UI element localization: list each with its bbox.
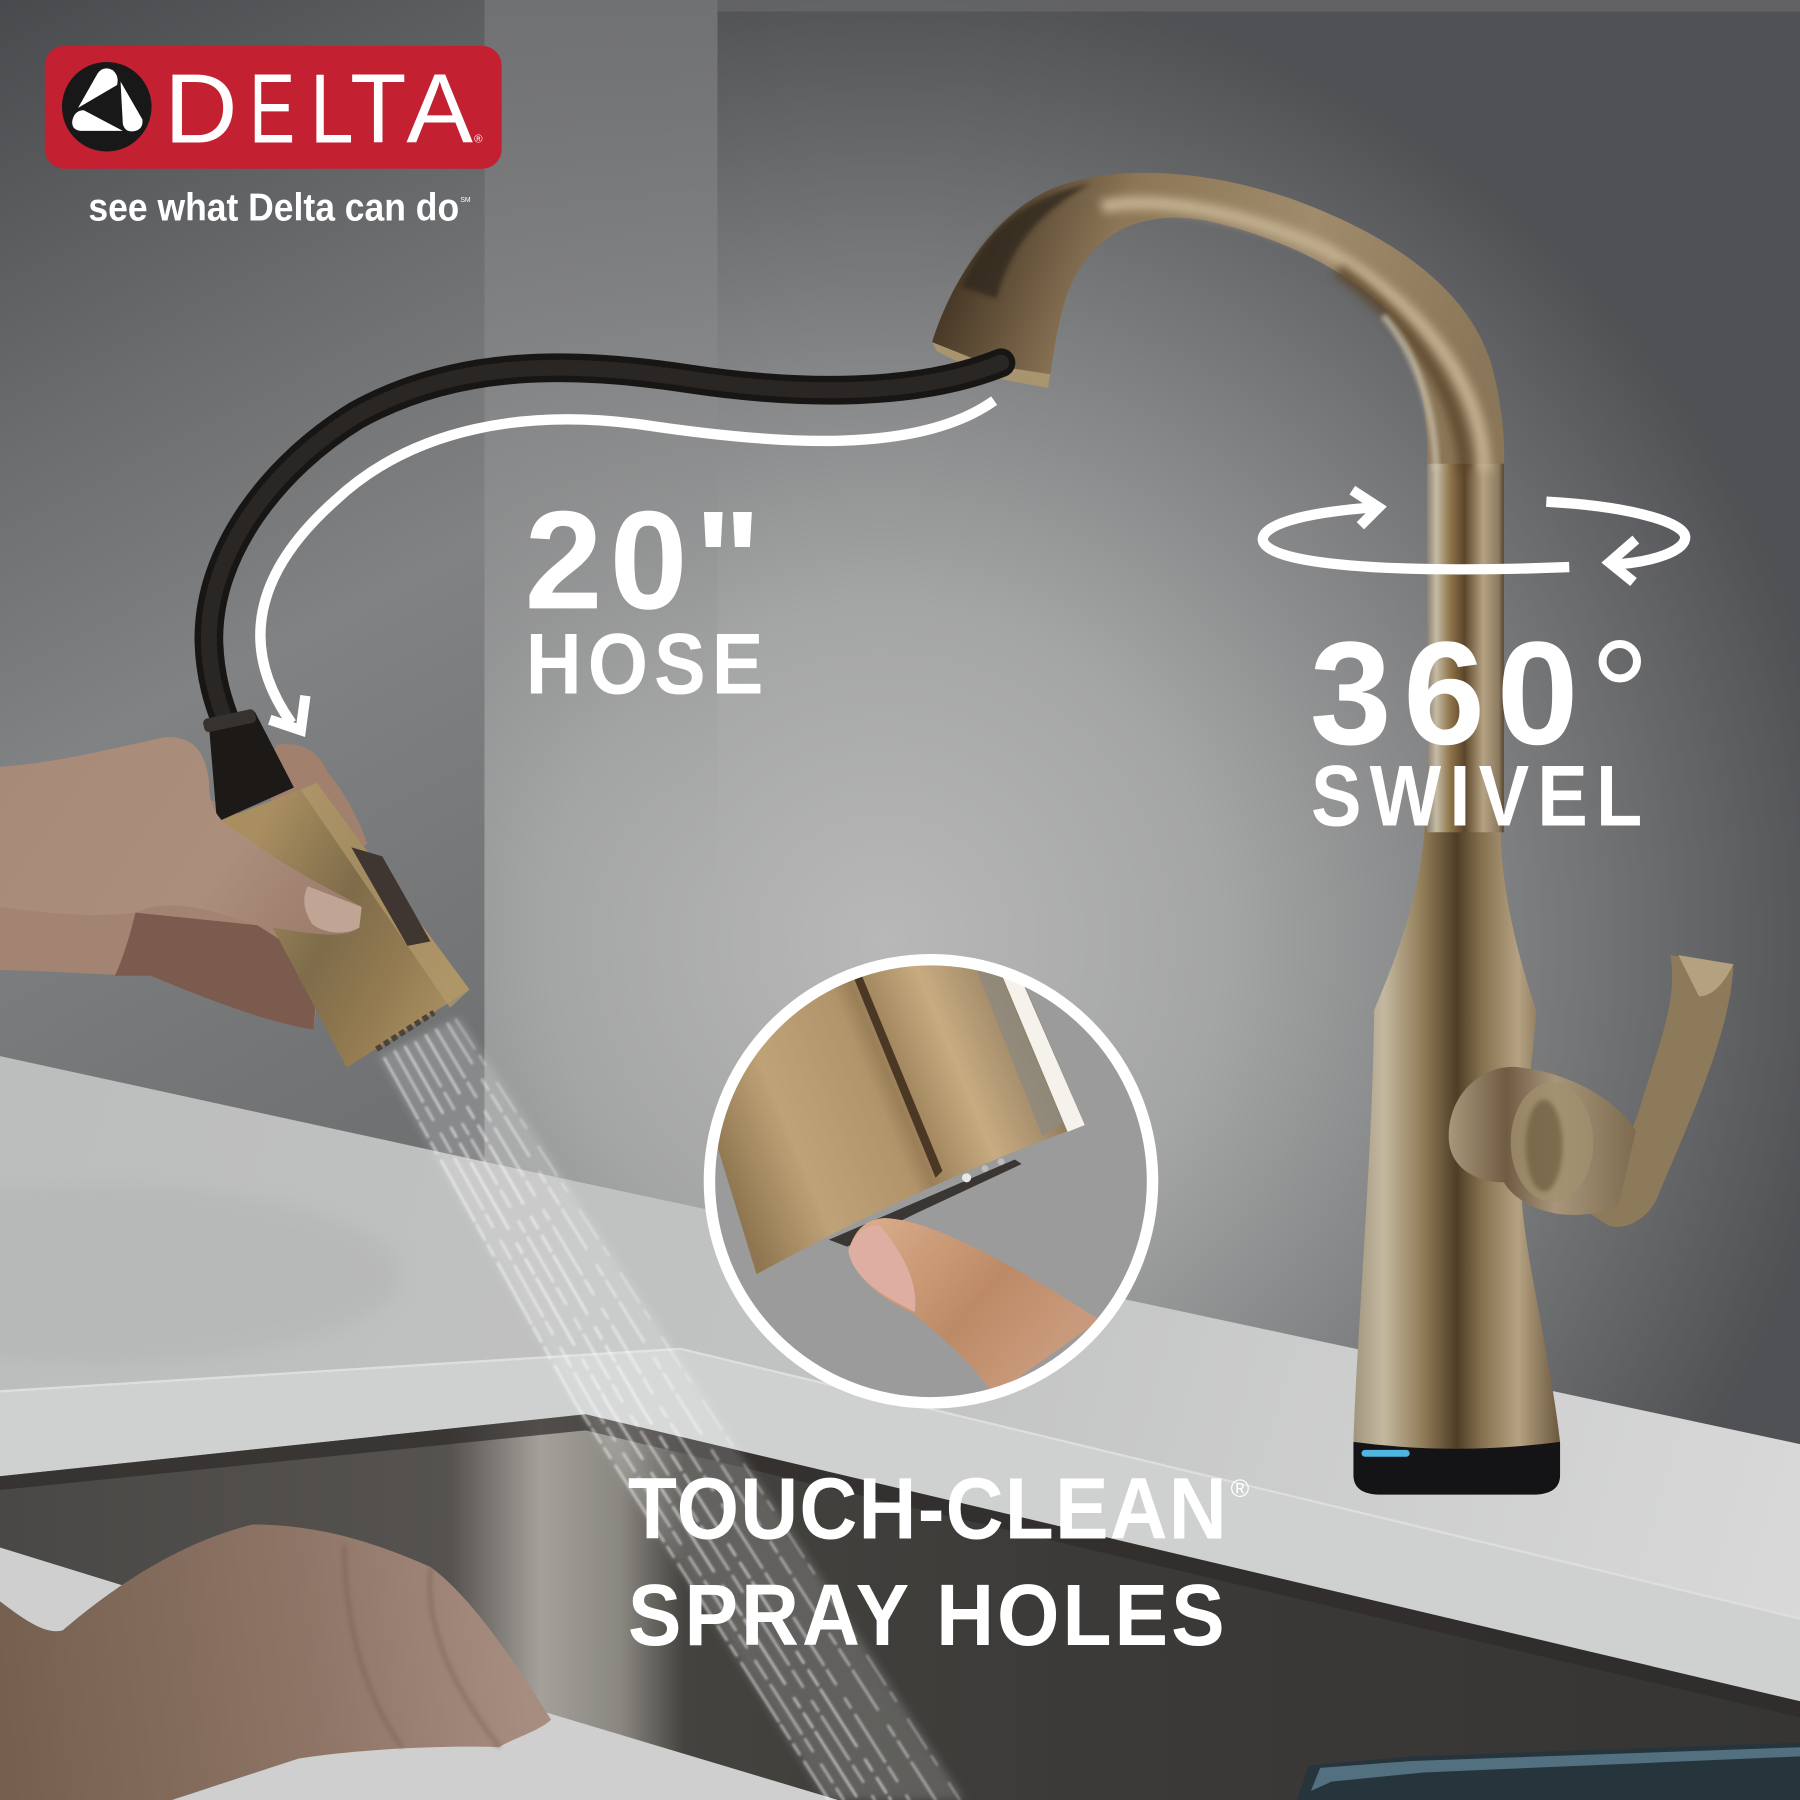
brand logo: ®: [474, 133, 483, 145]
arrows: 360 swivel: [1263, 490, 1685, 582]
icon: delta triangle mark: [62, 62, 152, 152]
palm: [0, 767, 327, 1030]
faucet column: [1427, 459, 1504, 832]
faucet body: [1353, 827, 1560, 1449]
spray head button: [351, 847, 430, 946]
spray head body: [217, 783, 470, 1068]
stainless sink basin: [0, 1414, 1800, 1800]
close-up finger: [848, 1218, 1100, 1395]
brand tagline: SM: [460, 197, 471, 204]
arrow: hose length: [260, 401, 994, 730]
faucet handle: [1449, 955, 1733, 1227]
wordmark: D: [164, 53, 238, 163]
label: 360 degree swivel: SWIVEL: [1311, 749, 1642, 844]
label: touch-clean spray holes: [628, 1459, 1250, 1664]
wordmark: L: [310, 53, 354, 163]
braided hose: [209, 363, 1001, 726]
label: touch-clean spray holes: TOUCH-CLEAN: [628, 1459, 1227, 1557]
water spray: [379, 1017, 964, 1800]
label: 360 degree swivel: [1310, 612, 1642, 844]
close-up spray holes: [829, 1159, 1022, 1247]
close-up spray head: [718, 965, 1085, 1274]
wordmark: E: [249, 53, 295, 163]
bottom-left hand on sink: [0, 1524, 551, 1800]
faucet: [932, 173, 1733, 1495]
label: 20 inch hose: [525, 481, 763, 712]
wordmark: [164, 53, 473, 163]
label: touch-clean spray holes: SPRAY HOLES: [628, 1566, 1225, 1664]
thumb and back of hand: [0, 737, 362, 935]
faucet spout arc: [932, 173, 1504, 471]
countertop: [0, 1056, 1800, 1800]
label: 20 inch hose: HOSE: [526, 617, 763, 712]
left hand holding sprayer: [0, 708, 470, 1068]
wordmark: T: [350, 53, 406, 163]
spray head collar: [209, 712, 294, 822]
wordmark: A: [406, 53, 473, 163]
callout: touch-clean spray holes close-up: [700, 941, 1153, 1403]
label: 360 degree swivel: 360: [1310, 612, 1578, 776]
brand logo: [45, 46, 502, 169]
faucet base: [1353, 1442, 1560, 1495]
spray holes: [377, 1012, 434, 1049]
brand tagline: see what Delta can do: [88, 186, 459, 229]
label: touch-clean spray holes: ®: [1231, 1475, 1250, 1503]
label: 20 inch hose: 20": [525, 481, 761, 638]
fingers behind sprayer: [258, 744, 367, 872]
